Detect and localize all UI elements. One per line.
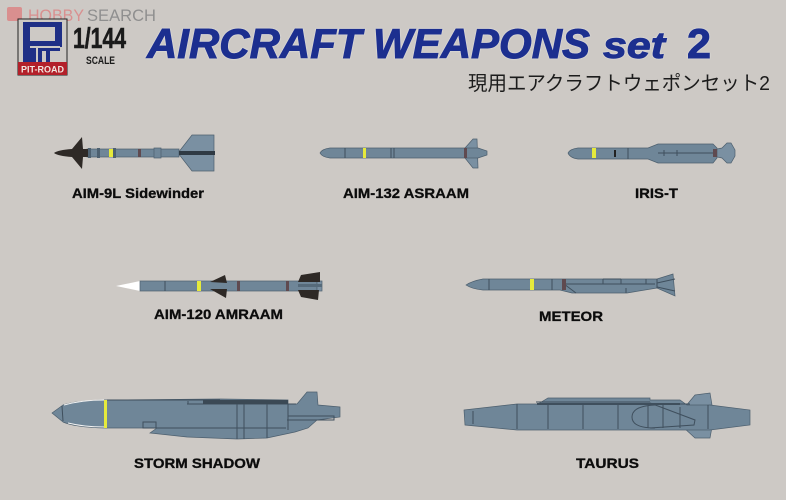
scale label: SCALE xyxy=(86,55,115,67)
missile: Storm Shadow xyxy=(52,392,340,439)
watermark: Hobby Search xyxy=(7,6,156,25)
label: AIM-120 AMRAAM: AIM-120 AMRAAM xyxy=(154,306,283,322)
missile: IRIS-T xyxy=(568,143,735,163)
watermark: Hobby Search: SEARCH xyxy=(87,6,156,25)
label: TAURUS: TAURUS xyxy=(576,455,639,471)
label: AIM-132 ASRAAM: AIM-132 ASRAAM xyxy=(343,185,469,201)
logo: Pit-Road xyxy=(18,19,67,76)
watermark: Hobby Search: HOBBY xyxy=(28,6,84,25)
label: IRIS-T: IRIS-T xyxy=(635,185,678,201)
title: AIRCRAFT WEAPONS xyxy=(146,20,590,67)
missile: AIM-9L Sidewinder xyxy=(54,135,215,171)
label: METEOR: METEOR xyxy=(539,308,603,324)
missile: Taurus xyxy=(464,393,750,438)
scale label xyxy=(73,23,126,67)
japanese subtitle: 現用エアクラフトウェポンセット2 xyxy=(468,72,770,95)
missile: Meteor xyxy=(466,274,675,296)
label: STORM SHADOW: STORM SHADOW xyxy=(134,455,261,471)
scale label: 1/144 xyxy=(73,23,126,55)
title: 2 xyxy=(687,20,711,67)
missile: AIM-132 ASRAAM xyxy=(320,139,487,168)
label: AIM-9L Sidewinder: AIM-9L Sidewinder xyxy=(72,185,205,201)
missile: AIM-120 AMRAAM xyxy=(116,272,322,300)
logo: Pit-Road: PIT-ROAD xyxy=(21,64,64,76)
title: set xyxy=(603,25,667,66)
